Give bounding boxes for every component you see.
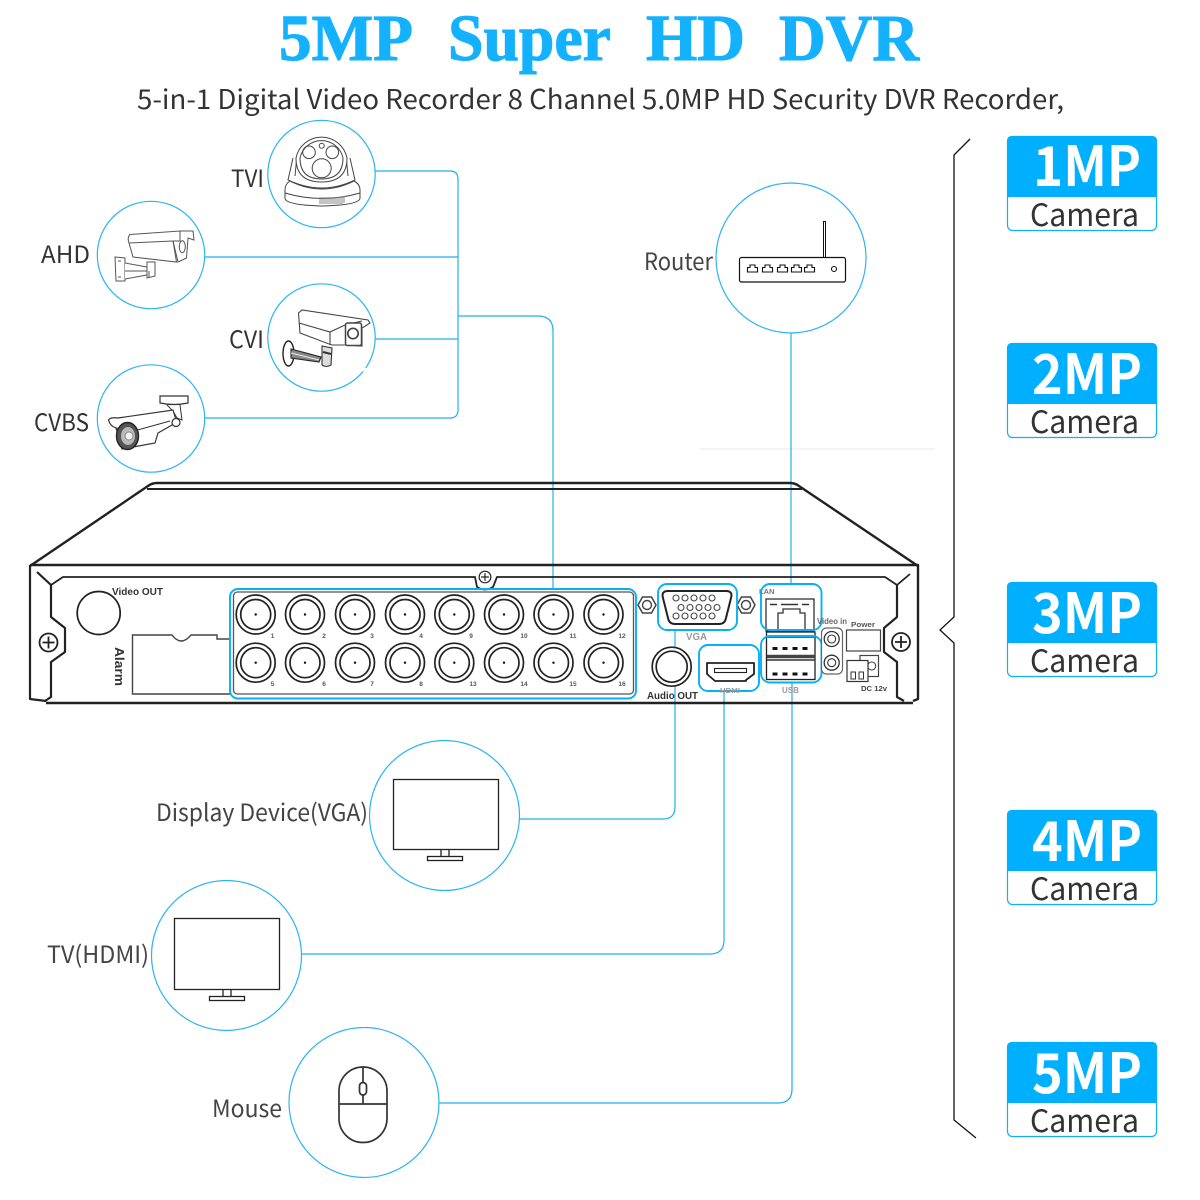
badge 4MP: Camera: [1030, 864, 1139, 909]
icon: dome camera: [285, 137, 360, 206]
LAN port: LAN: [759, 587, 774, 596]
BNC port group: 15: [569, 681, 577, 688]
BNC port group: 3: [370, 633, 374, 640]
Power and DC connector: Power: [851, 620, 875, 629]
connection lines: cameras to BNC inputs: [205, 171, 553, 589]
badge 5MP: 5MP: [1032, 1029, 1142, 1109]
BNC port group: 4: [419, 633, 423, 640]
circle CVBS: [97, 365, 205, 472]
USB port: USB: [782, 685, 799, 695]
BNC port group: 11: [570, 633, 577, 640]
display device: [156, 740, 520, 890]
BNC port group: [230, 589, 636, 698]
badge 2MP: [1007, 330, 1157, 442]
badge 1MP: [1007, 122, 1157, 235]
title: DVR: [779, 2, 920, 75]
subtitle: 5-in-1 Digital Video Recorder 8 Channel 5.0MP HD Security DVR Recorder,: [137, 78, 1064, 117]
label TVI: TVI: [231, 159, 264, 194]
VGA port: [638, 584, 755, 643]
BNC port group: 14: [520, 681, 528, 688]
circle mouse: [289, 1028, 439, 1178]
circle CVI: [268, 284, 375, 391]
DVR chassis outline: [30, 483, 918, 703]
TV: [47, 880, 302, 1030]
title: 5MP: [279, 2, 413, 75]
Audio OUT port: Audio OUT: [647, 690, 699, 702]
badge 5MP: [1007, 1029, 1157, 1141]
badge 2MP: Camera: [1030, 397, 1139, 442]
mouse: [212, 1028, 439, 1178]
Audio OUT port: [647, 647, 699, 702]
bracket: [940, 139, 976, 1138]
connection line: TV to HDMI: [301, 691, 724, 954]
icon: TV screen: [174, 918, 280, 1000]
icon: box camera on bracket: [115, 231, 194, 281]
USB port: [761, 632, 822, 695]
badge 5MP: Camera: [1030, 1096, 1139, 1141]
label CVBS: CVBS: [34, 403, 89, 438]
label Display Device: Display Device(VGA): [156, 793, 368, 828]
badge 1MP: Camera: [1030, 190, 1139, 235]
Video in port: Video in: [817, 617, 847, 626]
icon: monitor: [394, 780, 498, 860]
title: [279, 2, 920, 75]
HDMI port: HDMI: [720, 688, 740, 695]
Alarm block: [112, 635, 231, 694]
Power and DC connector: [846, 620, 888, 693]
connection line: mouse to USB: [439, 683, 792, 1103]
badge 3MP: [1007, 569, 1157, 681]
title: Super: [448, 2, 611, 75]
circle TV: [152, 880, 302, 1030]
camera AHD: [41, 201, 205, 309]
camera TVI: [231, 120, 375, 228]
Video OUT: Video OUT: [112, 586, 164, 598]
badge 1MP: 1MP: [1033, 122, 1141, 202]
BNC port group: 6: [322, 681, 326, 688]
circle Router: [716, 183, 866, 333]
badge 3MP: 3MP: [1032, 569, 1142, 649]
badge 3MP: Camera: [1030, 636, 1139, 681]
label Mouse: Mouse: [212, 1089, 282, 1124]
title: HD: [646, 2, 745, 75]
badge 4MP: [1007, 797, 1157, 909]
Video OUT: [77, 586, 164, 634]
label CVI: CVI: [229, 320, 264, 355]
icon: router: [740, 222, 846, 282]
VGA port: VGA: [686, 632, 707, 643]
label AHD: AHD: [41, 235, 90, 270]
Power and DC connector: DC 12v: [861, 684, 888, 693]
icon: mouse: [339, 1067, 387, 1142]
BNC port group: 12: [618, 633, 626, 640]
BNC port group: 7: [370, 681, 374, 688]
BNC port group: 10: [520, 633, 528, 640]
camera CVBS: [34, 365, 205, 472]
LAN port: [759, 584, 822, 631]
BNC port group: 9: [469, 633, 473, 640]
label Router: Router: [644, 242, 714, 277]
label TV(HDMI): TV(HDMI): [47, 935, 149, 970]
screws: [40, 634, 58, 652]
connection line: display to VGA: [519, 630, 675, 819]
icon: bullet camera: [108, 396, 188, 450]
icon: bullet camera on wall mount: [283, 310, 370, 366]
router: [644, 183, 866, 333]
BNC port group: 1: [271, 633, 275, 640]
circle AHD: [97, 201, 205, 309]
connection line: router to LAN: [790, 333, 792, 584]
Video in port: [817, 617, 847, 674]
DVR recorder rear panel: [30, 483, 918, 703]
circle gap: [364, 368, 366, 372]
camera CVI: [229, 284, 375, 391]
badge 4MP: 4MP: [1032, 797, 1142, 877]
BNC port group: 8: [419, 681, 423, 688]
BNC port group: 13: [469, 681, 477, 688]
circle display: [370, 740, 520, 890]
BNC port group: 5: [271, 681, 275, 688]
badge 2MP: 2MP: [1032, 330, 1142, 410]
BNC port group: 16: [618, 681, 626, 688]
circle TVI: [268, 120, 375, 228]
BNC port group: 2: [322, 633, 326, 640]
Alarm block: Alarm: [112, 647, 126, 686]
HDMI port: [699, 645, 759, 695]
